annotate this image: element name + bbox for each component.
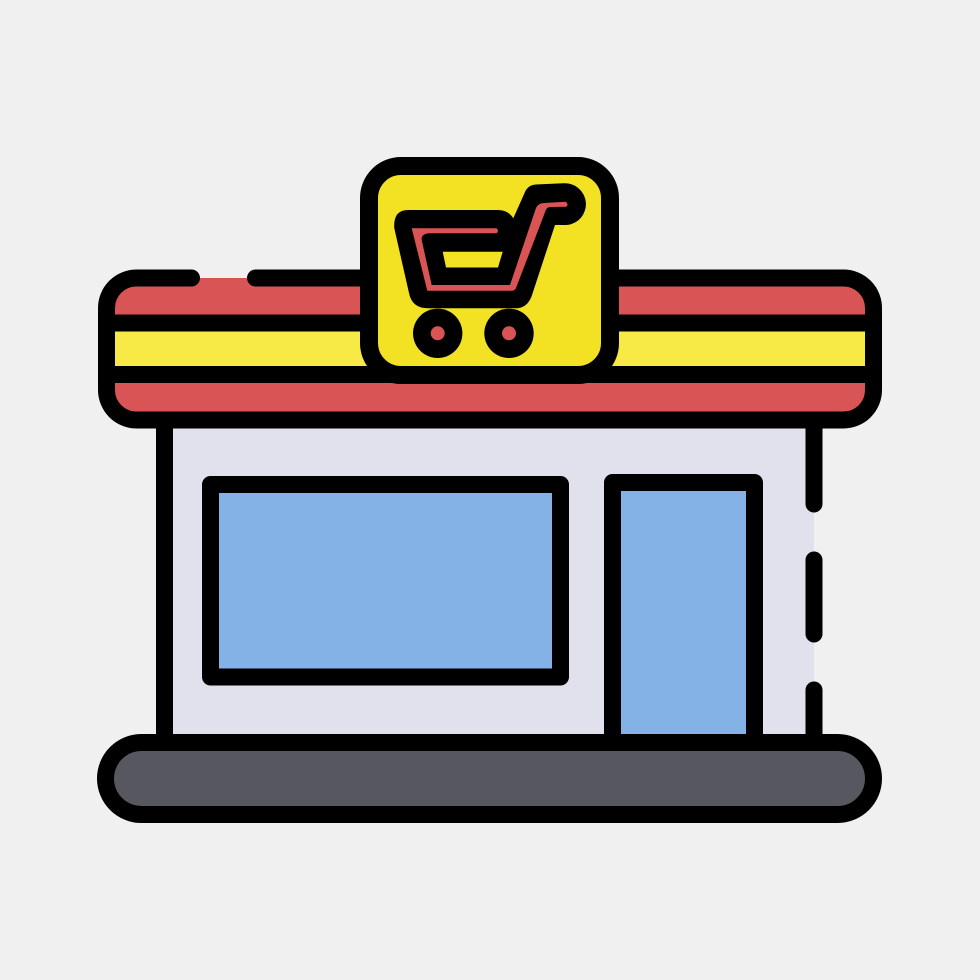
icon: shopping cart [394,183,586,358]
window [210,484,560,677]
sign board [369,166,610,375]
base platform [106,742,874,814]
door [612,482,754,742]
building wall [164,420,814,742]
striped awning [106,278,874,420]
